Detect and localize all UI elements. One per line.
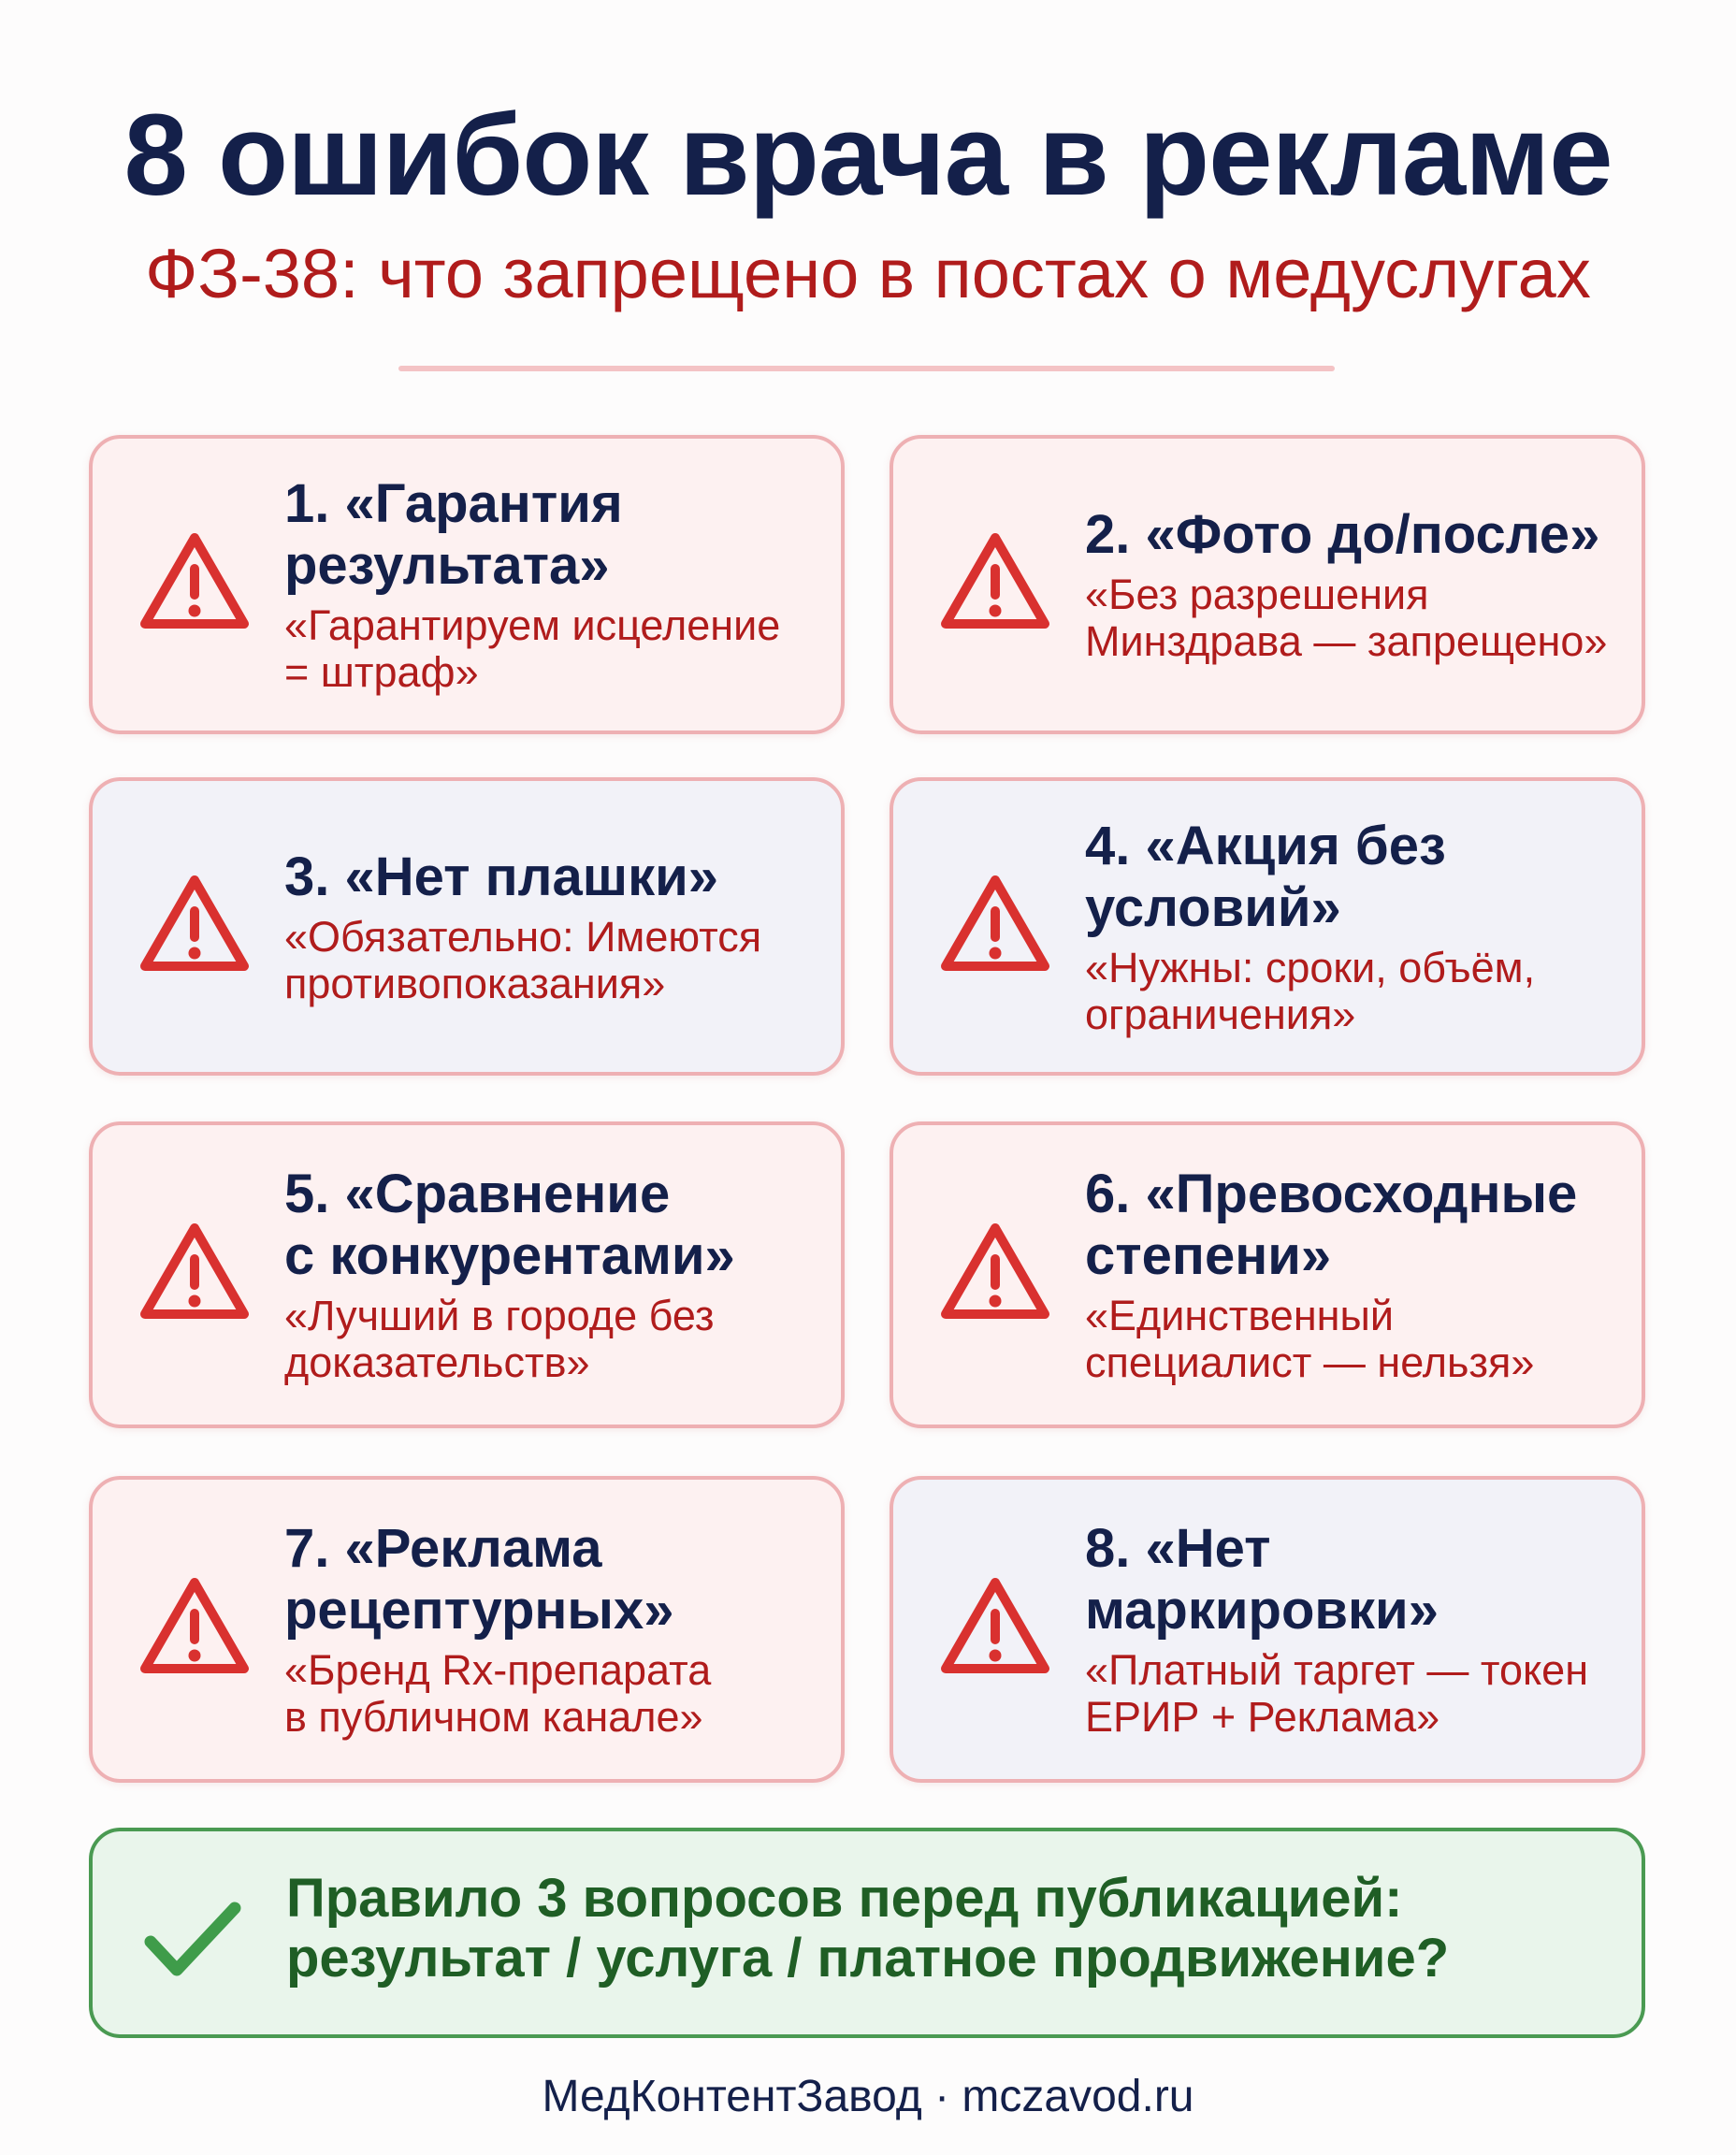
text xyxy=(284,846,761,1006)
text: «Платный таргет — токен xyxy=(1085,1646,1588,1694)
card 1 xyxy=(89,435,845,734)
text: 8. «Нет xyxy=(1085,1518,1271,1579)
text: с конкурентами» xyxy=(284,1225,735,1286)
icon: warning xyxy=(941,1578,1049,1673)
card 4 xyxy=(890,777,1645,1076)
text xyxy=(1085,504,1607,665)
text xyxy=(284,1164,735,1386)
text: ограничения» xyxy=(1085,990,1355,1038)
text: условий» xyxy=(1085,877,1341,937)
text: 4. «Акция без xyxy=(1085,816,1446,875)
icon: warning xyxy=(140,533,249,629)
text: «Без разрешения xyxy=(1085,571,1428,618)
text: 5. «Сравнение xyxy=(284,1164,670,1224)
text xyxy=(1085,1518,1588,1741)
text: «Лучший в городе без xyxy=(284,1292,715,1339)
card 7 xyxy=(89,1476,845,1783)
callout text xyxy=(286,1868,1449,1989)
text: ЕРИР + Реклама» xyxy=(1085,1693,1439,1741)
card 2 xyxy=(890,435,1645,734)
rule callout xyxy=(89,1828,1645,2038)
text: «Обязательно: Имеются xyxy=(284,913,761,960)
text: маркировки» xyxy=(1085,1580,1439,1641)
text: Минздрава — запрещено» xyxy=(1085,617,1607,665)
text: результата» xyxy=(284,535,610,596)
text: 7. «Реклама xyxy=(284,1518,601,1579)
subtitle: ФЗ-38: что запрещено в постах о медуслугах xyxy=(145,235,1591,312)
title: 8 ошибок врача в рекламе xyxy=(123,92,1613,220)
card 8 xyxy=(890,1476,1645,1783)
text: 3. «Нет плашки» xyxy=(284,846,718,907)
text xyxy=(1085,816,1535,1038)
text: противопоказания» xyxy=(284,960,665,1006)
card 6 xyxy=(890,1121,1645,1428)
text: 6. «Превосходные xyxy=(1085,1164,1577,1224)
text xyxy=(284,1518,711,1741)
text xyxy=(1085,1164,1577,1386)
text: в публичном канале» xyxy=(284,1693,703,1741)
callout text: Правило 3 вопросов перед публикацией: xyxy=(286,1868,1402,1929)
icon: warning xyxy=(941,1223,1049,1319)
text xyxy=(284,473,780,696)
text: «Бренд Rx-препарата xyxy=(284,1646,711,1694)
text: 2. «Фото до/после» xyxy=(1085,504,1599,565)
text: специалист — нельзя» xyxy=(1085,1338,1534,1386)
text: «Нужны: сроки, объём, xyxy=(1085,943,1535,991)
text: = штраф» xyxy=(284,648,479,696)
text: 1. «Гарантия xyxy=(284,473,623,534)
text: «Единственный xyxy=(1085,1292,1394,1339)
text: степени» xyxy=(1085,1225,1331,1286)
card 5 xyxy=(89,1121,845,1428)
icon: warning xyxy=(941,875,1049,971)
card 3 xyxy=(89,777,845,1076)
icon: warning xyxy=(140,1578,249,1673)
icon: warning xyxy=(140,1223,249,1319)
icon: check xyxy=(144,1902,241,1975)
callout text: результат / услуга / платное продвижение? xyxy=(286,1928,1449,1989)
text: «Гарантируем исцеление xyxy=(284,601,780,649)
icon: warning xyxy=(140,875,249,971)
footer: МедКонтентЗавод · mczavod.ru xyxy=(542,2072,1194,2121)
icon: warning xyxy=(941,533,1049,629)
text: доказательств» xyxy=(284,1338,590,1386)
text: рецептурных» xyxy=(284,1580,673,1641)
